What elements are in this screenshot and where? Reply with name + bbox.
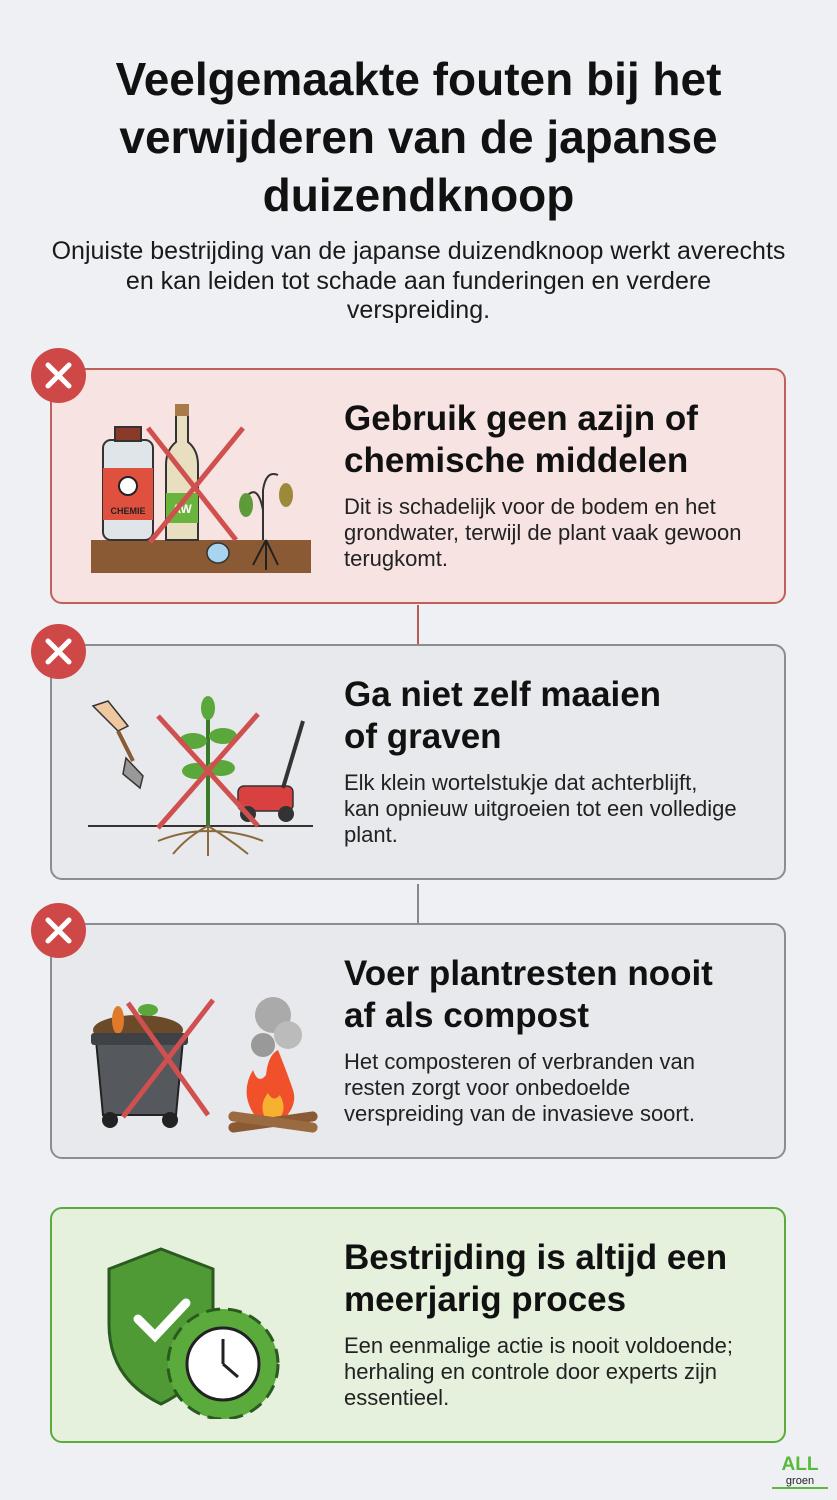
subtitle: Onjuiste bestrijding van de japanse duizendknoop werkt averechts: [52, 237, 785, 265]
icon: bottles crossed: [91, 404, 311, 573]
heading: af als compost: [344, 996, 589, 1035]
icon: x badge 1: [31, 348, 86, 403]
body text: [344, 494, 741, 571]
body text: Elk klein wortelstukje dat achterblijft,: [344, 770, 697, 795]
logo: groen: [786, 1475, 814, 1487]
subtitle: verspreiding.: [347, 296, 490, 324]
icon: shield with gear clock: [108, 1247, 280, 1419]
body text: Het composteren of verbranden van: [344, 1049, 695, 1074]
heading: [344, 1238, 727, 1319]
title: [116, 53, 721, 221]
icon: bottles crossed: CHEMIE: [110, 506, 146, 516]
panel: multi-year process: [50, 1207, 786, 1443]
connector 1: [417, 605, 419, 645]
body text: herhaling en controle door experts zijn: [344, 1359, 717, 1384]
body text: grondwater, terwijl de plant vaak gewoon: [344, 520, 741, 545]
heading: chemische middelen: [344, 441, 688, 480]
icon: compost bin and fire: [91, 997, 318, 1133]
heading: [344, 399, 698, 480]
heading: Gebruik geen azijn of: [344, 399, 698, 438]
title: duizendknoop: [263, 169, 574, 221]
body text: essentieel.: [344, 1385, 449, 1410]
logo: [772, 1454, 828, 1489]
body text: [344, 1333, 733, 1410]
panel: mowing: [50, 644, 786, 880]
heading: Voer plantresten nooit: [344, 954, 713, 993]
panel: compost: [50, 923, 786, 1159]
subtitle: [52, 237, 785, 324]
subtitle: en kan leiden tot schade aan funderingen en verdere: [126, 266, 711, 294]
heading: [344, 954, 713, 1035]
logo: ALL: [782, 1454, 818, 1475]
title: verwijderen van de japanse: [119, 111, 718, 163]
heading: meerjarig proces: [344, 1280, 626, 1319]
body text: resten zorgt voor onbedoelde: [344, 1075, 630, 1100]
body text: Dit is schadelijk voor de bodem en het: [344, 494, 716, 519]
icon: x badge 3: [31, 903, 86, 958]
body text: Een eenmalige actie is nooit voldoende;: [344, 1333, 733, 1358]
icon: plant with shovel and mower: [88, 696, 313, 856]
heading: Bestrijding is altijd een: [344, 1238, 727, 1277]
heading: [344, 675, 661, 756]
heading: of graven: [344, 717, 502, 756]
body text: kan opnieuw uitgroeien tot een volledige: [344, 796, 737, 821]
body text: terugkomt.: [344, 546, 448, 571]
icon: x badge 2: [31, 624, 86, 679]
body text: [344, 1049, 695, 1126]
body text: plant.: [344, 822, 398, 847]
body text: [344, 770, 737, 847]
body text: verspreiding van de invasieve soort.: [344, 1101, 695, 1126]
icon: bottles crossed: AW: [172, 502, 192, 516]
title: Veelgemaakte fouten bij het: [116, 53, 721, 105]
panel: chemicals: [50, 368, 786, 604]
heading: Ga niet zelf maaien: [344, 675, 661, 714]
connector 2: [417, 884, 419, 924]
